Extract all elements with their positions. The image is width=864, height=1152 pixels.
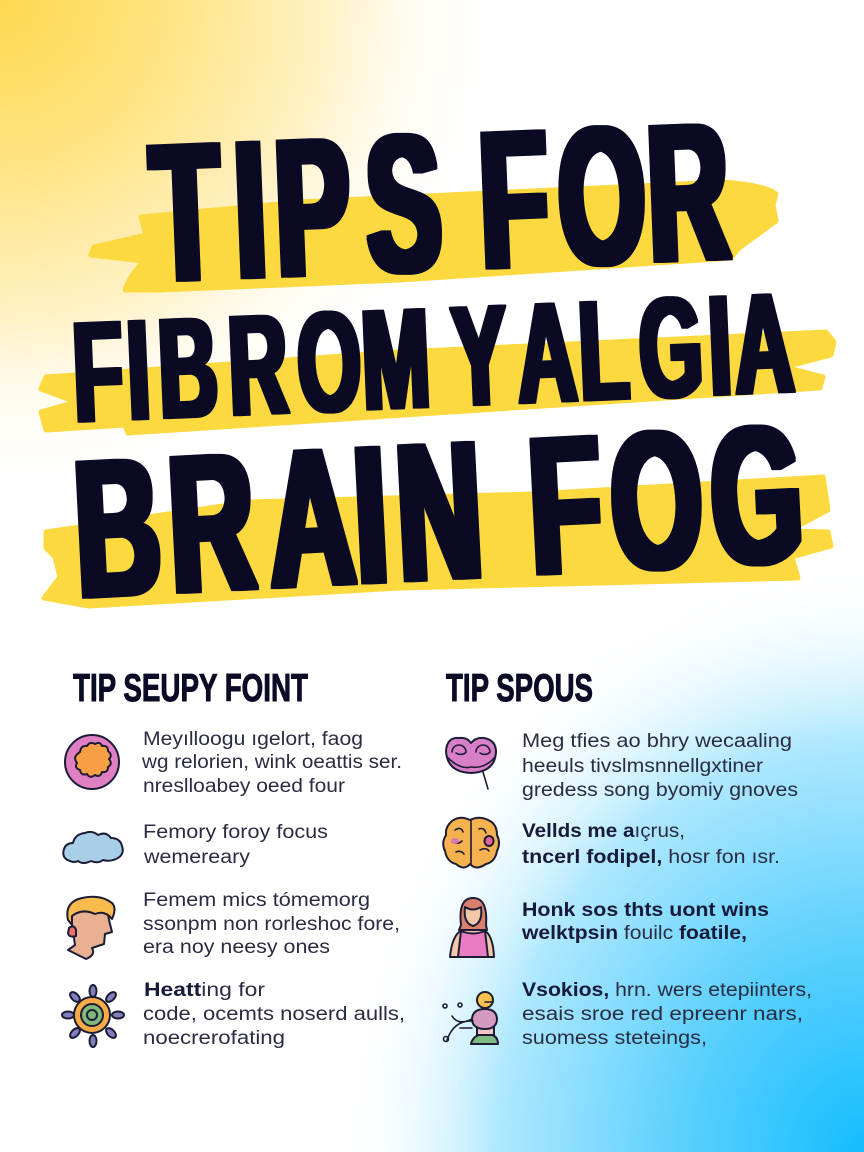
text: Femory foroy focus xyxy=(143,822,328,843)
text xyxy=(141,729,402,797)
text: Vellds me a ıçrus, xyxy=(522,821,685,842)
brush stroke: line 2 xyxy=(41,332,834,433)
text: Femem mics tómemorg xyxy=(143,890,370,911)
text: Heatt ing for xyxy=(144,980,266,1001)
text xyxy=(143,980,405,1049)
text xyxy=(143,822,328,868)
tip right 3 xyxy=(450,898,769,957)
tip right 1 xyxy=(446,731,798,801)
text xyxy=(143,890,400,958)
icon: person with lines xyxy=(443,992,498,1044)
icon: cloud xyxy=(63,832,123,863)
text: wemereary xyxy=(143,847,251,868)
tip left 4 xyxy=(62,980,405,1049)
icon: round cell xyxy=(65,735,119,789)
text: era noy neesy ones xyxy=(143,937,330,958)
text: nreslloabey oeed four xyxy=(143,776,346,797)
text: code, ocemts noserd aulls, xyxy=(143,1004,405,1025)
title line: FIBROMYALGIA: FIBROMYALGIA xyxy=(70,263,796,453)
text: tncerl fodipel, hosr fon ısr. xyxy=(522,847,780,868)
icon: woman xyxy=(450,898,494,957)
heading: left column: TIP SEUPY FOINT xyxy=(73,667,308,710)
text: Honk sos thts uont wins xyxy=(522,900,769,921)
text: Meyılloogu ıgelort, faog xyxy=(143,729,363,750)
text xyxy=(522,980,812,1049)
text: suomess steteings, xyxy=(522,1028,707,1049)
text: ssonpm non rorleshoc fore, xyxy=(143,914,400,935)
text: gredess song byomiy gnoves xyxy=(522,780,798,801)
icon: lollipop brain xyxy=(446,738,496,789)
text: esais sroe red epreenr nars, xyxy=(522,1004,803,1025)
heading: right column: TIP SPOUS xyxy=(446,667,593,710)
text xyxy=(522,821,780,868)
text: Meg tfies ao bhry wecaaling xyxy=(522,731,792,752)
icon: head profile xyxy=(67,897,114,959)
text: noecrerofating xyxy=(143,1028,285,1049)
text: wg relorien, wink oeattis ser. xyxy=(141,752,402,773)
text: Vsokios, hrn. wers etepiinters, xyxy=(522,980,812,1001)
icon: brain xyxy=(443,818,499,868)
tip left 3 xyxy=(67,890,400,959)
icon: flower xyxy=(62,985,124,1047)
text xyxy=(521,900,769,944)
title xyxy=(41,81,834,639)
text xyxy=(522,731,798,801)
tip left 1 xyxy=(65,729,402,797)
title line: BRAIN FOG: BRAIN FOG xyxy=(70,385,808,639)
brush stroke: line 3 xyxy=(44,477,831,606)
brush stroke: line 1 xyxy=(91,182,776,290)
tip left 2 xyxy=(63,822,328,868)
tip right 2 xyxy=(443,818,780,868)
text: heeuls tivslmsnnellgxtiner xyxy=(522,756,764,777)
text: welktpsin fouilc foatile, xyxy=(521,923,747,944)
tip right 4 xyxy=(443,980,812,1049)
title line: TIPS FOR: TIPS FOR xyxy=(148,81,732,323)
